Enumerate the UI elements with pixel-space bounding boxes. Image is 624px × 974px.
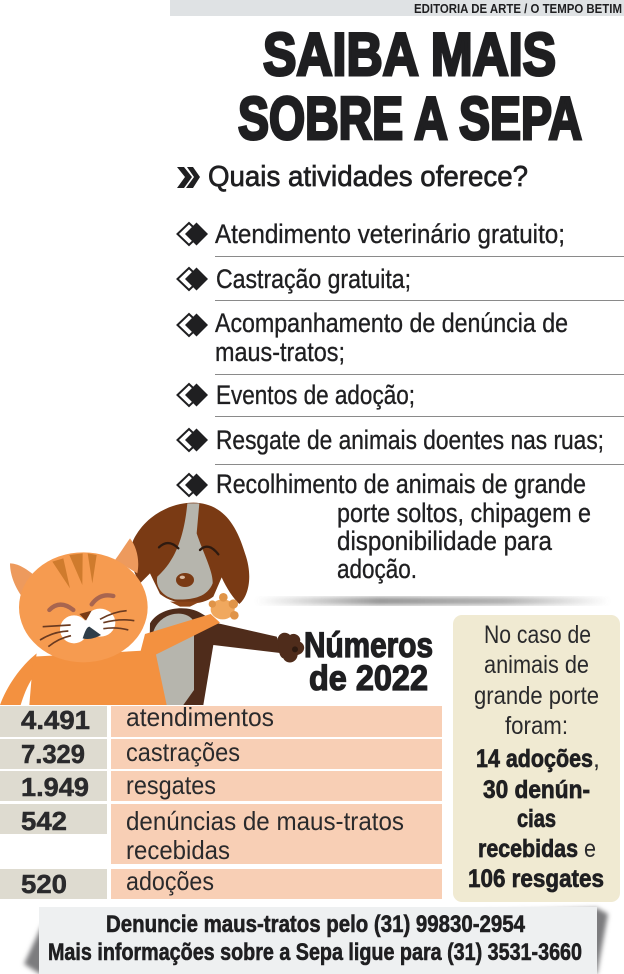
item: veterinary care (178, 219, 624, 256)
row: adoções: 520 (21, 869, 67, 899)
dog (131, 503, 304, 705)
row: adoções: adoções (126, 866, 214, 896)
row: atendimentos: 4.491 (21, 705, 90, 735)
panel: large animals: 106 resgates (468, 865, 604, 893)
panel: large animals: 30 denún- (483, 776, 590, 804)
banner shadow (24, 908, 608, 974)
panel: large animals: foram: (505, 712, 568, 740)
row: resgates: 1.949 (21, 772, 89, 802)
panel: large animals: No caso de (484, 621, 591, 649)
heading: numbers of 2022: Números (304, 626, 433, 665)
title (238, 21, 582, 152)
dog blaze (157, 503, 213, 599)
row: castrações (0, 737, 442, 769)
heading: numbers of 2022: de 2022 (309, 659, 428, 698)
item: adoption events (178, 380, 624, 416)
cat body (29, 650, 167, 705)
row: castrações: 7.329 (21, 739, 85, 769)
item: large animals: porte soltos, chipagem e (337, 498, 591, 528)
cat paw (211, 599, 235, 619)
heading: activities: Quais atividades oferece? (208, 161, 528, 193)
item: adoption events: Eventos de adoção; (216, 380, 415, 410)
top credit bar (170, 0, 624, 16)
panel: large animals: 14 adoções (476, 745, 593, 773)
panel: large animals: animais de (484, 651, 589, 679)
dog eyes (159, 543, 178, 548)
dog nose (176, 573, 194, 587)
row: atendimentos: atendimentos (126, 702, 274, 732)
panel: large animals (453, 615, 620, 902)
row: denúncias (0, 804, 442, 865)
cat (0, 538, 239, 705)
panel: large animals: , (593, 745, 600, 773)
row: resgates (0, 770, 442, 802)
row: denúncias: recebidas (126, 835, 230, 865)
dog head and ears (131, 503, 249, 604)
row: resgates: resgates (126, 770, 216, 800)
illustration: dog and cat (0, 503, 304, 705)
row: denúncias: denúncias de maus-tratos (126, 806, 404, 836)
dog body (148, 608, 283, 705)
row: adoções (0, 866, 442, 899)
item: large animals (178, 469, 591, 584)
cat head (19, 552, 148, 662)
dog chest (153, 614, 194, 705)
icon: double chevron (177, 167, 200, 188)
row: castrações: castrações (126, 737, 240, 767)
item: castration (178, 264, 624, 300)
heading: numbers of 2022 (304, 626, 433, 698)
item: abuse reports: maus-tratos; (215, 337, 345, 367)
dog paw (278, 633, 304, 662)
footer contact banner: Denuncie maus-tratos pelo (31) 99830-2954 (106, 911, 526, 938)
panel: large animals: recebidas (478, 835, 578, 863)
item: castration: Castração gratuita; (216, 264, 411, 294)
panel: large animals: grande porte (474, 682, 599, 710)
cat muzzle (60, 615, 88, 643)
row: denúncias: 542 (21, 806, 67, 836)
item: street rescue (178, 425, 624, 464)
panel: large animals: cias (517, 805, 556, 833)
title: SAIBA MAIS (263, 21, 556, 88)
item: large animals: disponibilidade para (337, 526, 553, 556)
cat ears (10, 563, 38, 598)
cat eyes (49, 605, 73, 610)
item: veterinary care: Atendimento veterinário gratuito; (215, 219, 565, 249)
stats table (0, 702, 442, 899)
item: abuse reports: Acompanhamento de denúncia de (215, 308, 568, 338)
panel: large animals: e (584, 835, 596, 863)
cat stripes (52, 553, 97, 588)
item: abuse reports (178, 308, 624, 374)
cat whiskers (40, 625, 71, 647)
cat left arm (0, 653, 37, 705)
item: large animals: adoção. (337, 554, 417, 584)
activities list (178, 219, 624, 584)
ground shadow (255, 597, 610, 605)
footer contact banner (24, 907, 608, 974)
row: atendimentos (0, 702, 442, 737)
cat raised arm (140, 614, 220, 655)
